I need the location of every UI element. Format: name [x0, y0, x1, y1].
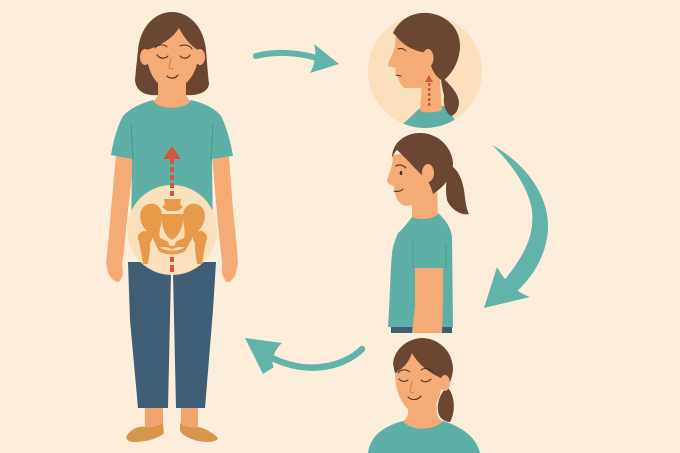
- neck: [403, 396, 443, 428]
- hair: [392, 133, 453, 194]
- eye, brow, smile: [394, 165, 406, 191]
- face: [147, 28, 198, 89]
- neck: [412, 186, 438, 219]
- face: [387, 150, 436, 206]
- ear: [422, 49, 434, 67]
- facial features: [398, 369, 434, 400]
- ear: [440, 375, 450, 391]
- hair back: [135, 12, 209, 95]
- arms: [106, 155, 238, 282]
- pelvis inset circle: [127, 185, 217, 275]
- ponytail: [438, 387, 454, 422]
- red dashed arrow: [163, 146, 181, 272]
- arrow: bottom curved: [245, 338, 362, 374]
- side view upper body: [387, 133, 469, 333]
- ear: [422, 164, 434, 182]
- front-view standing woman: [106, 12, 238, 442]
- arrow: right curved: [484, 145, 548, 308]
- circle background: [368, 14, 482, 128]
- neck arrow: [425, 75, 433, 106]
- neck profile inset: [368, 13, 482, 135]
- face: [395, 353, 441, 413]
- facial features: [155, 45, 192, 78]
- neck: [153, 78, 191, 108]
- arm: [412, 268, 443, 333]
- hair: [393, 338, 453, 390]
- ponytail: [441, 76, 459, 116]
- ears: [140, 49, 150, 65]
- shirt: [388, 213, 453, 327]
- teal t-shirt: [111, 100, 233, 240]
- ponytail: [446, 165, 469, 214]
- hair: [393, 13, 460, 81]
- face profile: [388, 32, 440, 88]
- arrow: top curved: [256, 44, 339, 73]
- neck: [420, 70, 442, 112]
- head tilted down: [368, 338, 480, 453]
- legs and shoes: [126, 262, 218, 442]
- pants band: [391, 326, 452, 333]
- pelvis bones: [138, 199, 207, 264]
- shirt: [368, 421, 480, 453]
- shirt: [403, 106, 455, 128]
- eyebrow and mouth: [396, 49, 406, 76]
